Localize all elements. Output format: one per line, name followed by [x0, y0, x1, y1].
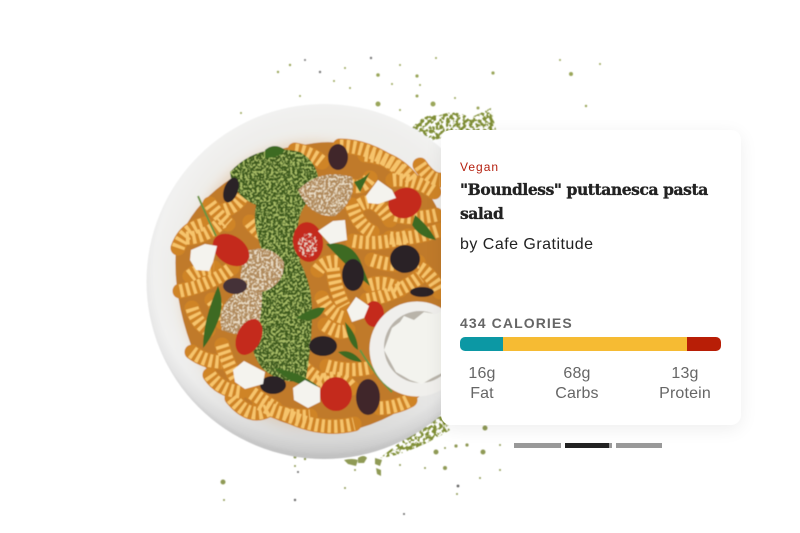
recipe card	[441, 130, 741, 425]
crumbled cheese	[190, 180, 396, 408]
herb topping	[230, 150, 319, 381]
fat: Fat	[470, 384, 494, 402]
fat: 16g	[468, 364, 496, 382]
arugula leaves	[198, 146, 436, 392]
macro bar	[460, 337, 721, 351]
bowl	[146, 104, 502, 459]
breadcrumb topping	[220, 174, 353, 334]
protein	[659, 364, 711, 402]
olives	[220, 144, 434, 415]
recipe title	[460, 180, 708, 223]
carbs: 68g	[563, 364, 591, 382]
category label: Vegan	[460, 160, 499, 174]
carbs: Carbs	[555, 384, 599, 402]
protein: 13g	[671, 364, 699, 382]
scattered herbs: top	[240, 57, 601, 142]
recipe title: salad	[460, 204, 503, 223]
restaurant: by Cafe Gratitude	[460, 236, 594, 253]
fat	[468, 364, 496, 402]
pasta	[175, 142, 450, 430]
recipe title: "Boundless" puttanesca pasta	[460, 180, 708, 199]
scattered herbs: bottom	[220, 414, 501, 515]
side dish: ramekin of ricotta	[370, 302, 464, 396]
calories heading: 434 CALORIES	[460, 315, 573, 331]
protein: Protein	[659, 384, 711, 402]
carbs	[555, 364, 599, 402]
carousel indicator	[514, 443, 662, 448]
cherry tomatoes	[207, 182, 427, 411]
